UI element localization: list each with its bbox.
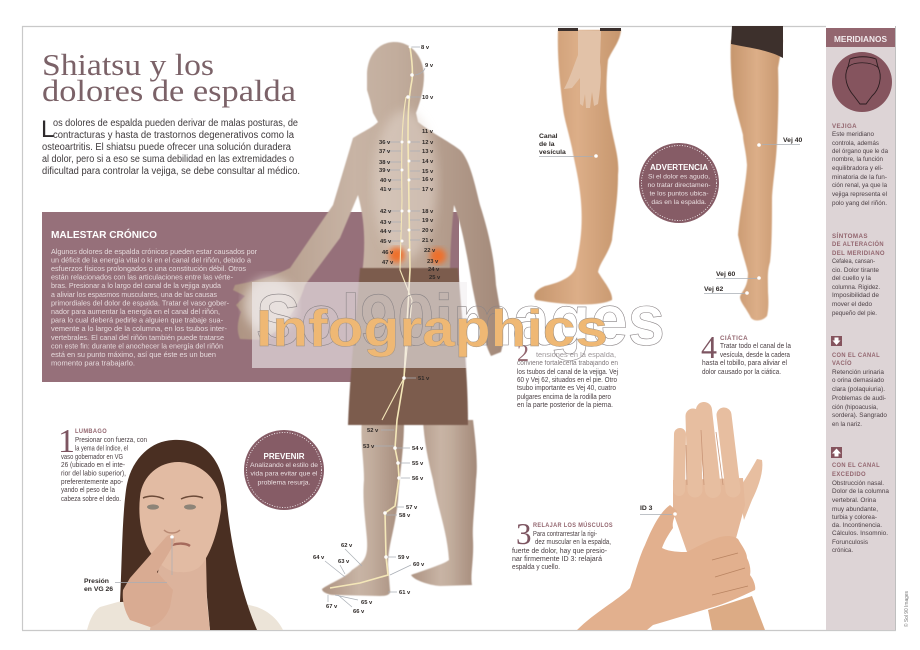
section 1: lumbago: Presionar con fuerza, con bbox=[75, 437, 147, 444]
section 4: ciática: 4 bbox=[701, 329, 717, 365]
hand on thigh bbox=[564, 31, 601, 108]
text: vejiga bbox=[832, 123, 888, 207]
chart: meridian point labels: 43 v bbox=[380, 220, 392, 226]
section 4: ciática bbox=[701, 329, 791, 376]
chart: meridian point labels: 21 v bbox=[422, 238, 434, 244]
text: síntomas: Imposibilidad de bbox=[832, 292, 879, 299]
text: síntomas: cio. Dolor tirante bbox=[832, 267, 879, 274]
leg: front view with hand: vesícula bbox=[539, 149, 566, 156]
left leg bbox=[322, 420, 404, 596]
text: canal excedido: crónica. bbox=[832, 547, 853, 554]
chart: meridian point labels: 63 v bbox=[338, 559, 350, 565]
chart: meridian point labels: 65 v bbox=[361, 600, 373, 606]
panel text: malestar crónico: primordiales del dolor de espalda. Tratar el vaso gober- bbox=[51, 298, 230, 308]
section 4: ciática: dolor causado por la ciática. bbox=[702, 369, 781, 376]
body silhouette bbox=[233, 42, 503, 356]
text: canal vacío: o orina demasiado bbox=[832, 377, 884, 384]
icon: bladder bbox=[832, 52, 892, 112]
shorts strip bbox=[558, 28, 621, 31]
chart: meridian point labels: 8 v bbox=[421, 45, 430, 51]
text: canal excedido: Dolor de la columna bbox=[832, 488, 889, 495]
text: canal vacío: CON EL CANAL bbox=[832, 352, 880, 359]
chart: meridian point labels: 16 v bbox=[422, 177, 434, 183]
chart: meridian point labels: 18 v bbox=[422, 209, 434, 215]
text: canal excedido: Cálculos. Insomnio. bbox=[832, 530, 888, 537]
section 1: lumbago: vaso gobernador en VG bbox=[61, 454, 123, 461]
chart: meridian point labels: 10 v bbox=[422, 95, 434, 101]
leg: back view bbox=[704, 26, 802, 320]
section 4: ciática: CIÁTICA bbox=[720, 333, 748, 342]
section 2 text: tsubo importante es Vej 40, cuatro bbox=[517, 385, 616, 392]
chart: meridian point labels: 24 v bbox=[428, 267, 440, 273]
chart: meridian point labels: 58 v bbox=[399, 513, 411, 519]
chart: meridian point labels: 40 v bbox=[380, 178, 392, 184]
label: presión en VG 26 bbox=[170, 535, 174, 539]
panel text: malestar crónico: bras. Presionar a lo largo del canal de la vejiga ayuda bbox=[51, 281, 222, 290]
text: síntomas: mover el dedo bbox=[832, 301, 872, 308]
text: vejiga: nombre, la función bbox=[832, 156, 883, 163]
chart: meridian point labels: 20 v bbox=[422, 228, 434, 234]
section 2 text: pulgares encima de la rodilla pero bbox=[517, 394, 611, 401]
chart: meridian point labels bbox=[313, 45, 441, 615]
callout: prevenir: vida para evitar que el bbox=[251, 470, 318, 478]
panel text: malestar crónico: para lo cual deberá pedirle a alguien que trabaje sua- bbox=[51, 316, 224, 324]
section 3: relajar los músculos: fuerte de dolor, hay que presio- bbox=[512, 548, 608, 555]
callout: advertencia: ADVERTENCIA bbox=[650, 162, 708, 172]
section 3: relajar los músculos bbox=[512, 516, 613, 571]
text: vejiga: equilibradora y eli- bbox=[832, 165, 883, 172]
panel text: malestar crónico: Algunos dolores de espalda crónicos pueden estar causados por bbox=[51, 247, 258, 256]
points and labels: Vej 60 bbox=[716, 271, 735, 278]
chart: meridian point labels: 9 v bbox=[425, 63, 434, 69]
chart: meridian point labels: 67 v bbox=[326, 604, 338, 610]
chart: meridian point labels: 38 v bbox=[379, 160, 391, 166]
panel text: malestar crónico: a aliviar los espasmos musculares, una de las causas bbox=[51, 290, 217, 299]
section 1: lumbago: rior del labio superior), bbox=[61, 470, 126, 478]
chart: meridian point labels: 44 v bbox=[380, 229, 392, 235]
points and labels: Vej 62 bbox=[704, 286, 723, 293]
section 3: relajar los músculos: RELAJAR LOS MÚSCULOS bbox=[533, 520, 613, 529]
leg: front view with hand: de la bbox=[539, 141, 555, 148]
title: dolores de espalda bbox=[42, 74, 297, 108]
panel text: malestar crónico bbox=[51, 228, 258, 368]
chart: meridian point labels: 45 v bbox=[380, 239, 392, 245]
section 1: lumbago: LUMBAGO bbox=[75, 428, 107, 435]
panel text: malestar crónico: está en su punto máximo, así que éste es un buen bbox=[51, 350, 216, 359]
intro text: dificultad para controlar la vejiga, se debe consultar al médico. bbox=[42, 166, 300, 177]
callout: prevenir: PREVENIR bbox=[264, 451, 305, 461]
gripping hand bbox=[577, 505, 755, 630]
chart: meridian point labels: 41 v bbox=[380, 187, 392, 193]
chart: meridian point labels: 61 v bbox=[399, 590, 411, 596]
text: síntomas bbox=[832, 231, 885, 317]
eyes, brows, mouth bbox=[143, 496, 203, 546]
panel text: malestar crónico: momento para trabajarlo. bbox=[51, 358, 135, 368]
section 3: relajar los músculos: 3 bbox=[516, 516, 532, 551]
back hand thumb bbox=[738, 459, 762, 520]
face bbox=[139, 462, 221, 572]
text: vejiga: del órgano que le da bbox=[832, 148, 888, 155]
watermark: Infographics: Infographics bbox=[256, 300, 608, 358]
text: vejiga: minatoria de la fun- bbox=[832, 174, 887, 181]
section 1: lumbago: 26 (ubicado en el inte- bbox=[61, 462, 126, 469]
section 1: lumbago: preferentemente apo- bbox=[61, 479, 124, 486]
text: síntomas: del cuello y la bbox=[832, 275, 871, 282]
panel text: malestar crónico: esfuerzos físicos prolongados o una constitución débil. Otros bbox=[51, 264, 246, 273]
text: vejiga: polo yang del riñón. bbox=[832, 200, 887, 207]
section 3: relajar los músculos: espalda y cuello. bbox=[512, 564, 560, 571]
section 2 text: 2 bbox=[517, 341, 529, 367]
text: síntomas: DE ALTERACIÓN bbox=[832, 239, 884, 248]
chart: meridian point labels: 55 v bbox=[412, 461, 424, 467]
section 2 text: conviene fortalecerla trabajando en bbox=[517, 360, 618, 367]
callout: advertencia: te los puntos ubica- bbox=[650, 190, 708, 198]
panel text: malestar crónico: están relacionados con las articulaciones entre las vérte- bbox=[51, 272, 234, 282]
callout: prevenir: Analizando el estilo de bbox=[250, 462, 318, 469]
callout: prevenir: problema resurja. bbox=[258, 480, 311, 486]
text: canal vacío: ción (hipoacusia, bbox=[832, 404, 878, 411]
point: vesícula bbox=[594, 154, 598, 158]
text: síntomas: DEL MERIDIANO bbox=[832, 250, 885, 257]
point and label: ID 3 bbox=[673, 512, 677, 516]
section 2 text: en la parte posterior de la pierna. bbox=[517, 402, 613, 409]
text: vejiga: VEJIGA bbox=[832, 123, 857, 130]
callout: advertencia: das en la espalda. bbox=[651, 199, 707, 206]
text: canal vacío: Retención urinaria bbox=[832, 369, 884, 376]
chart: meridian point labels: 11 v bbox=[422, 129, 434, 135]
chart: meridian point labels: 64 v bbox=[313, 555, 325, 561]
section 3: relajar los músculos: nar firmemente ID 3: relajará bbox=[512, 556, 602, 563]
intro text: osteoartritis. El shiatsu puede ofrecer una solución duradera bbox=[42, 142, 291, 153]
back hand palm bbox=[673, 478, 745, 552]
lower back hot spots bbox=[389, 247, 446, 264]
panel text: malestar crónico: vertebrales. El canal del riñón también puede tratarse bbox=[51, 333, 224, 342]
text: canal excedido: turbia y colorea- bbox=[832, 514, 877, 521]
text: vejiga: controla, además bbox=[832, 140, 880, 147]
chart: meridian point labels: 17 v bbox=[422, 187, 434, 193]
photo: two hands bbox=[577, 410, 765, 630]
watermark: outlined Sol90images: Sol90images bbox=[256, 281, 665, 361]
section 1: lumbago: 1 bbox=[58, 423, 75, 460]
forearm bbox=[708, 596, 765, 630]
text: canal vacío: en la nariz. bbox=[832, 421, 862, 428]
chart: meridian point labels: 51 v bbox=[418, 376, 430, 382]
chart: meridian point labels: 23 v bbox=[427, 259, 439, 265]
photo: woman pressing VG 26: en VG 26 bbox=[84, 586, 113, 593]
section 4: ciática: vesícula, desde la cadera bbox=[720, 352, 790, 359]
chart: meridian point labels: 25 v bbox=[429, 275, 441, 281]
text: síntomas: columna. Rigidez. bbox=[832, 284, 880, 291]
panel text: malestar crónico: un déficit de la energía vital o ki en el canal del riñón, debido a bbox=[51, 256, 252, 264]
text: canal excedido: muy abundante, bbox=[832, 506, 878, 513]
section 4: ciática: Tratar todo el canal de la bbox=[720, 343, 791, 350]
chart: meridian point labels: 47 v bbox=[382, 260, 394, 266]
chart: meridian point labels: 37 v bbox=[379, 149, 391, 155]
panel text: malestar crónico: vemente a lo largo de la columna, en los tsubos inter- bbox=[51, 324, 228, 333]
back hand fingers bbox=[679, 410, 733, 490]
text: canal excedido: CON EL CANAL bbox=[832, 462, 880, 469]
chart: meridian point labels: 62 v bbox=[341, 543, 353, 549]
panel: meridianos sidebar: MERIDIANOS bbox=[834, 35, 887, 44]
shorts bbox=[731, 26, 783, 58]
sidebar header bbox=[826, 28, 895, 47]
photo: two hands: ID 3 bbox=[640, 505, 653, 512]
text: canal vacío bbox=[832, 352, 887, 428]
section 3: relajar los músculos: Para contrarrestar la rigi- bbox=[533, 531, 598, 538]
chart: meridian point labels: 19 v bbox=[422, 218, 434, 224]
text: canal vacío: Problemas de audi- bbox=[832, 395, 886, 402]
chart: meridian point labels: 56 v bbox=[412, 476, 424, 482]
callout: prevenir bbox=[244, 430, 324, 510]
text: síntomas: pequeño del pie. bbox=[832, 310, 877, 317]
panel: malestar crónico background bbox=[42, 212, 459, 382]
title bbox=[42, 48, 297, 108]
text: canal excedido bbox=[832, 462, 889, 554]
chart: meridian point labels: 14 v bbox=[422, 159, 434, 165]
chart: meridian point labels: 46 v bbox=[382, 250, 394, 256]
points and labels: Vej 40 bbox=[783, 137, 802, 144]
chart: meridian point labels: 52 v bbox=[367, 428, 379, 434]
text: vejiga: Este meridiano bbox=[832, 131, 874, 138]
chart: meridian point labels: 53 v bbox=[363, 444, 375, 450]
text: canal vacío: sordera). Sangrado bbox=[832, 412, 887, 419]
panel: meridianos sidebar bbox=[826, 26, 896, 630]
panel text: malestar crónico: con este fin: durante el anochecer la energía del riñón bbox=[51, 342, 223, 350]
text: síntomas: Cefalea, cansan- bbox=[832, 258, 875, 265]
watermark band bbox=[252, 282, 467, 368]
icon: arrow up bbox=[831, 447, 842, 458]
chart: meridian point labels: 54 v bbox=[412, 446, 424, 452]
chart: meridian point labels: 36 v bbox=[379, 140, 391, 146]
section 1: lumbago: yando el peso de la bbox=[61, 487, 115, 494]
points and labels bbox=[704, 137, 802, 295]
chart: meridian point labels: 60 v bbox=[413, 562, 425, 568]
panel text: malestar crónico: nador para aumentar la energía en el canal del riñón, bbox=[51, 307, 220, 316]
text: vejiga: ción renal, ya que la bbox=[832, 182, 887, 189]
credit: © Sol 90 Images bbox=[903, 591, 910, 627]
section 2 text: 60 y Vej 62, situados en el pie. Otro bbox=[517, 377, 617, 384]
callout: advertencia: Si el dolor es agudo, bbox=[648, 174, 710, 180]
finger gaps bbox=[712, 553, 748, 595]
chart: meridian point labels: 57 v bbox=[406, 505, 418, 511]
text: canal vacío: clara (polaquiuria). bbox=[832, 386, 885, 393]
text: canal excedido: vertebral. Orina bbox=[832, 497, 876, 504]
title: Shiatsu y los bbox=[42, 48, 214, 82]
chart: meridian point labels: 66 v bbox=[353, 609, 365, 615]
chart: meridian point labels: 42 v bbox=[380, 209, 392, 215]
chart: meridian point labels: 15 v bbox=[422, 169, 434, 175]
shirt bbox=[87, 600, 283, 630]
section 1: lumbago bbox=[58, 423, 147, 503]
chart: meridian point labels: 59 v bbox=[398, 555, 410, 561]
section 1: lumbago: la yema del índice, el bbox=[75, 446, 128, 452]
icon: arrow down bbox=[831, 336, 842, 346]
callout: advertencia bbox=[639, 143, 719, 223]
figure: back view body with meridian bbox=[233, 42, 503, 596]
section 3: relajar los músculos: dez muscular en la espalda, bbox=[535, 539, 611, 546]
text: canal excedido: da. Incontinencia. bbox=[832, 522, 882, 529]
text: canal vacío: VACÍO bbox=[832, 358, 852, 367]
intro text: al dolor, pero si a eso se suma debilidad en las extremidades o bbox=[42, 154, 294, 165]
photo: woman pressing VG 26: Presión bbox=[84, 578, 109, 585]
meridian line bbox=[330, 47, 412, 588]
chart: meridian point labels: 39 v bbox=[379, 168, 391, 174]
chart: meridian point labels: 22 v bbox=[424, 248, 436, 254]
panel text: malestar crónico: MALESTAR CRÓNICO bbox=[51, 228, 157, 241]
chart: meridian point labels: 13 v bbox=[422, 149, 434, 155]
intro text: os dolores de espalda pueden derivar de malas posturas, de bbox=[53, 118, 298, 129]
text: síntomas: SÍNTOMAS bbox=[832, 231, 868, 240]
text: canal excedido: EXCEDIDO bbox=[832, 471, 866, 478]
section 2 text bbox=[517, 341, 618, 409]
hair bbox=[120, 440, 257, 630]
section 2 text: tensiones en la espalda, bbox=[536, 352, 616, 359]
callout: advertencia: no tratar directamen- bbox=[647, 182, 711, 189]
drop cap: L bbox=[41, 116, 54, 143]
text: canal excedido: Obstrucción nasal. bbox=[832, 480, 884, 487]
leg: front view with hand bbox=[534, 28, 621, 304]
chart: meridian point labels: 12 v bbox=[422, 140, 434, 146]
intro text bbox=[41, 116, 300, 177]
text: canal excedido: Forunculosis bbox=[832, 539, 869, 546]
section 2 text: los tsubos del canal de la vejiga. Vej bbox=[517, 369, 618, 376]
photo: woman pressing VG 26 bbox=[84, 440, 283, 630]
intro text: contracturas y hasta de trastornos degenerativos como la bbox=[53, 130, 294, 141]
text: vejiga: vejiga representa el bbox=[832, 191, 887, 198]
shorts bbox=[348, 268, 468, 425]
neck and chest bbox=[150, 558, 210, 630]
section 1: lumbago: cabeza sobre el dedo. bbox=[61, 496, 121, 503]
leg: front view with hand: Canal bbox=[539, 133, 558, 140]
section 4: ciática: hasta el tobillo, para aliviar el bbox=[702, 360, 787, 367]
hand and finger bbox=[123, 535, 175, 627]
right leg bbox=[411, 420, 477, 586]
